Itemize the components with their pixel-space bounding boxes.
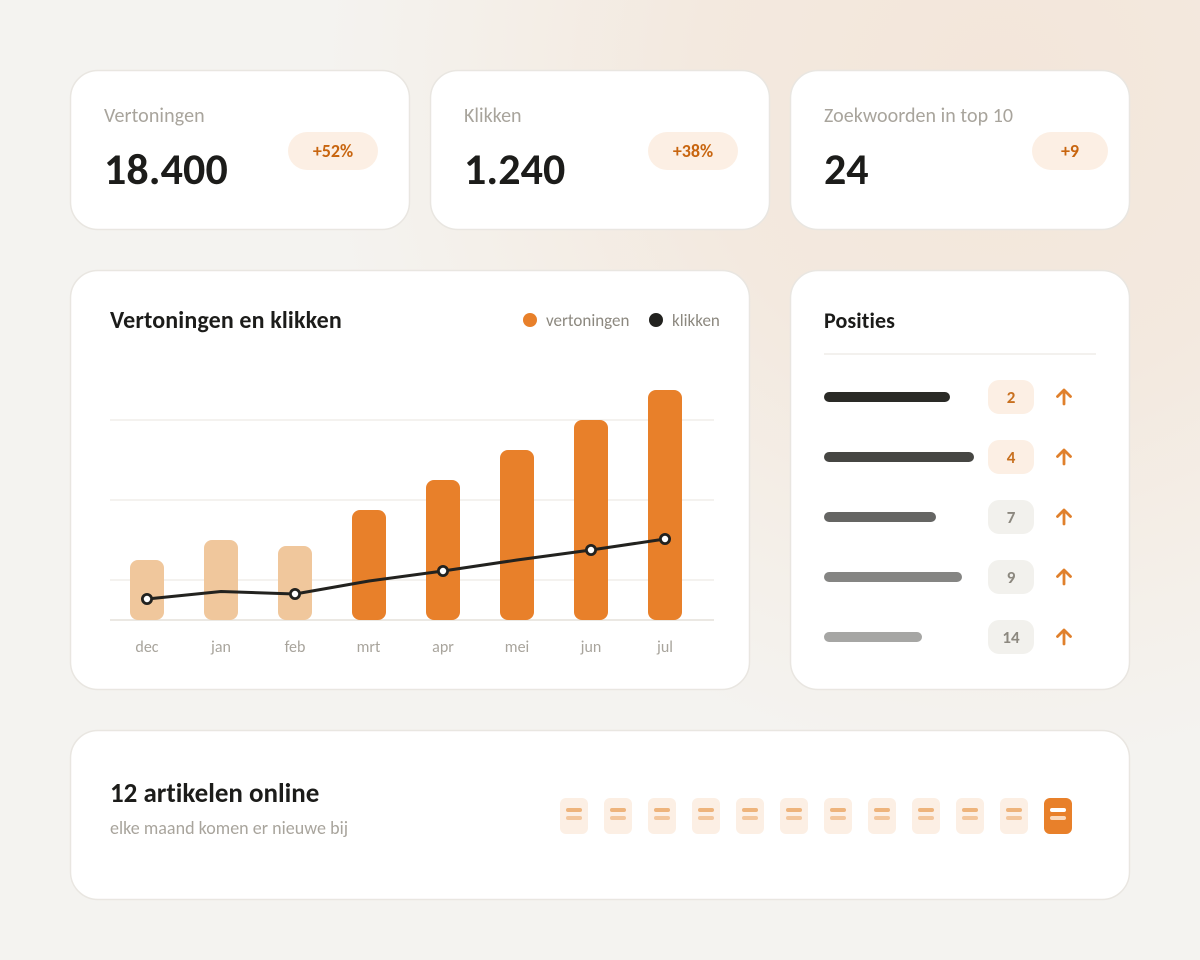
panel: artikelen <box>70 730 1130 900</box>
value: 1.240: 1.240 <box>464 142 565 196</box>
label: Zoekwoorden in top 10: Zoekwoorden in top 10 <box>824 104 1013 128</box>
row: position 14: 14 <box>1002 627 1020 648</box>
legend <box>523 310 720 331</box>
month labels: mrt <box>357 638 381 657</box>
line chart: klikken <box>142 534 670 604</box>
badge: +52%: +52% <box>313 140 353 162</box>
row: position 14 <box>824 620 1070 654</box>
label: Klikken: Klikken <box>464 104 522 128</box>
row: position 2 <box>824 380 1070 414</box>
month labels: jul <box>656 638 673 657</box>
article icons <box>560 798 1072 834</box>
row: position 4 <box>824 440 1070 474</box>
month labels: jan <box>210 638 231 657</box>
value: 24: 24 <box>824 142 869 196</box>
row: position 7: 7 <box>1007 507 1016 528</box>
heading: 12 artikelen online: 12 artikelen online <box>110 777 319 810</box>
row: position 2: 2 <box>1007 387 1016 408</box>
row: position 7 <box>824 500 1070 534</box>
row: position 4: 4 <box>1007 447 1016 468</box>
label: Vertoningen: Vertoningen <box>104 104 205 128</box>
row: position 9 <box>824 560 1070 594</box>
legend: vertoningen <box>546 310 629 331</box>
badge: +9: +9 <box>1061 140 1079 162</box>
badge: +9 <box>1032 132 1108 170</box>
bar chart <box>130 390 682 620</box>
legend: klikken <box>672 310 720 331</box>
panel: Klikken KPI <box>430 70 770 230</box>
panel: Vertoningen KPI <box>70 70 410 230</box>
heading: Posities: Posities <box>824 307 895 334</box>
month labels: mei <box>505 638 529 657</box>
month labels: feb <box>285 638 305 657</box>
badge: +38%: +38% <box>673 140 713 162</box>
panel: Zoekwoorden KPI <box>790 70 1130 230</box>
subtext: elke maand komen er nieuwe bij <box>110 817 348 839</box>
month labels: dec <box>135 638 159 657</box>
row: position 9: 9 <box>1007 567 1016 588</box>
panel: Posities <box>790 270 1130 690</box>
month labels: apr <box>432 638 454 657</box>
badge: +52% <box>288 132 378 170</box>
chart title: Vertoningen en klikken <box>110 306 342 335</box>
panel: Vertoningen en klikken chart <box>70 270 750 690</box>
value: 18.400: 18.400 <box>104 142 228 196</box>
badge: +38% <box>648 132 738 170</box>
month labels: jun <box>580 638 601 657</box>
month labels <box>135 638 673 657</box>
